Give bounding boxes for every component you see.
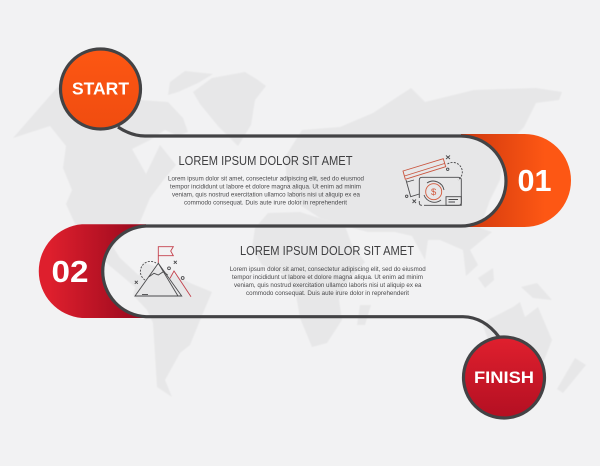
finish badge [464,337,544,418]
body 02: tempor incididunt ut labore et dolore magna aliqua. Ut enim ad minim [232,274,423,281]
body 01: tempor incididunt ut labore et dolore magna aliqua. Ut enim ad minim [170,184,361,190]
icon: credit card and money: $ [431,187,437,198]
body 02: Lorem ipsum dolor sit amet, consectetur adipiscing elit, sed do eiusmod [230,266,426,273]
heading 01: LOREM IPSUM DOLOR SIT AMET [178,154,353,168]
body 01: Lorem ipsum dolor sit amet, consectetur adipiscing elit, sed do eiusmod [168,176,364,182]
body 01 [168,176,364,206]
text block 01 [168,154,364,206]
number 02: 02 [52,254,88,289]
world map silhouette [13,71,586,397]
panel 02: red pill tab [39,224,146,318]
icon: credit card and money [403,156,462,205]
connector line [103,127,506,337]
body 01: veniam, quis nostrud exercitation ullamco laboris nisi ut aliquip ex ea [172,192,360,198]
heading 02: LOREM IPSUM DOLOR SIT AMET [240,244,414,258]
start badge [60,49,140,129]
body 02 [230,266,426,297]
body 01: commodo consequat. Duis aute irure dolor in reprehenderit [184,200,347,206]
body 02: veniam, quis nostrud exercitation ullamco laboris nisi ut aliquip ex ea [234,282,422,289]
number 01: 01 [518,163,552,198]
finish badge: FINISH [474,368,534,387]
body 02: commodo consequat. Duis aute irure dolor in reprehenderit [246,290,409,297]
start badge: START [72,78,129,98]
text block 02 [230,244,426,297]
panel 01: orange pill tab [461,134,571,227]
icon: mountain with flag [135,247,191,297]
